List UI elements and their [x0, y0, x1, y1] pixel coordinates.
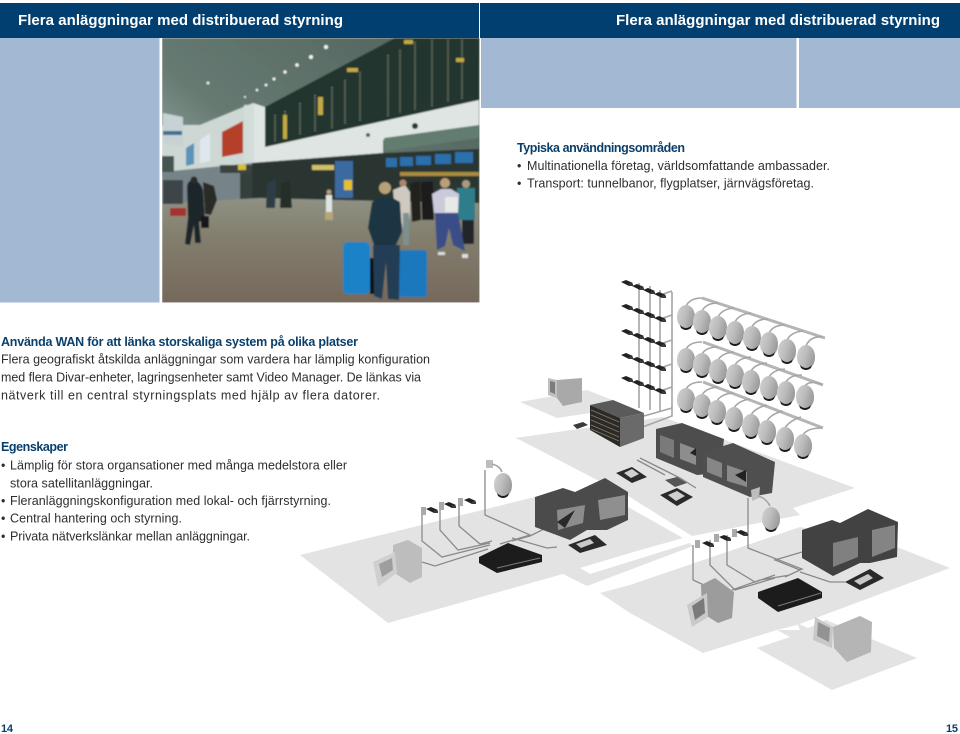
site 1: dome camera rows: [677, 298, 825, 459]
pillar poster: [335, 161, 353, 198]
header band: left page: [0, 3, 479, 38]
heading: Egenskaper: Egenskaper: [1, 440, 68, 454]
text block: features list: •: [1, 458, 5, 472]
text block: features list: [1, 458, 347, 544]
text block: WAN description: [1, 352, 430, 402]
site 2: recorder: [479, 543, 542, 573]
direction sign: [384, 125, 479, 151]
heading: right page title: Flera anläggningar med distribuerad styrning: [616, 12, 940, 29]
text block: features list: Fleranläggningskonfiguration med lokal- och fjärrstyrning.: [10, 494, 331, 508]
text block: features list: Lämplig för stora organsationer med många medelstora eller: [10, 458, 347, 472]
site 1: keyboards and switch: [616, 458, 696, 506]
panel: blue block top right narrow: [799, 38, 960, 108]
man with luggage: [370, 258, 374, 294]
text block: usage list: •: [517, 176, 521, 190]
site 3: dome camera: [751, 487, 780, 532]
site 1: workstation: [548, 378, 582, 406]
crowd left: [163, 180, 183, 204]
dark shop band: [252, 149, 479, 205]
text block: features list: Privata nätverkslänkar mellan anläggningar.: [10, 530, 250, 544]
site 2: cabling: [422, 470, 557, 566]
text block: usage list: [517, 159, 830, 190]
text block: features list: Central hantering och styrning.: [10, 512, 182, 526]
site 3: fixed cameras: [695, 529, 748, 548]
site 2: workstation: [373, 540, 422, 587]
wall band: [250, 100, 479, 163]
heading: WAN section: Använda WAN för att länka storskaliga system på olika platser: [1, 335, 358, 349]
site 1: wall cameras column: [621, 280, 672, 428]
ceiling lights: [207, 45, 328, 98]
site 1: monitor pair A: [656, 423, 724, 475]
crowd right: [393, 185, 410, 240]
central site: workstation: [813, 616, 872, 662]
floor plates: [300, 390, 950, 690]
site 2: dome camera: [486, 460, 512, 498]
site 3: cabling: [693, 498, 845, 590]
text block: usage list: Multinationella företag, världsomfattande ambassader.: [527, 159, 830, 173]
text block: usage list: •: [517, 159, 521, 173]
site 3: monitors: [802, 509, 898, 576]
site 2: keyboard: [568, 535, 607, 553]
text block: WAN description: Flera geografiskt åtskilda anläggningar som vardera har lämplig konfiguration: [1, 352, 430, 366]
site 2: monitors: [535, 478, 628, 540]
text block: WAN description: med flera Divar-enheter, lagringsenheter samt Video Manager. De länkas via: [1, 370, 421, 384]
left shop band: [162, 163, 252, 210]
photo: airport departure hall: [162, 38, 480, 303]
heading: Typiska användningsområden: Typiska användningsområden: [517, 141, 685, 155]
floor: [162, 198, 479, 303]
text block: usage list: Transport: tunnelbanor, flygplatser, järnvägsföretag.: [527, 176, 814, 190]
text block: WAN description: nätverk till en central styrningsplats med hjälp av flera datorer.: [1, 388, 380, 402]
heading: left page title: Flera anläggningar med distribuerad styrning: [18, 12, 343, 29]
site 3: workstation: [687, 578, 734, 627]
site 2: fixed cameras: [421, 498, 476, 515]
site 3: keyboard: [845, 569, 884, 590]
ads: [222, 121, 243, 157]
text block: features list: •: [1, 530, 5, 544]
panel: blue block top right wide: [481, 38, 796, 108]
header band: right page: [480, 3, 960, 38]
text block: features list: •: [1, 494, 5, 508]
flight board: [265, 38, 479, 147]
text block: features list: •: [1, 512, 5, 526]
panel: blue block left: [0, 38, 160, 302]
text block: features list: stora satellitanläggningar.: [10, 476, 153, 490]
site 1: recorder rack: [573, 400, 644, 447]
diagram: multi-site network: [300, 280, 950, 690]
site 3: recorder: [758, 578, 822, 612]
site 1: monitor pair B: [703, 443, 775, 497]
info screens: [386, 152, 473, 167]
